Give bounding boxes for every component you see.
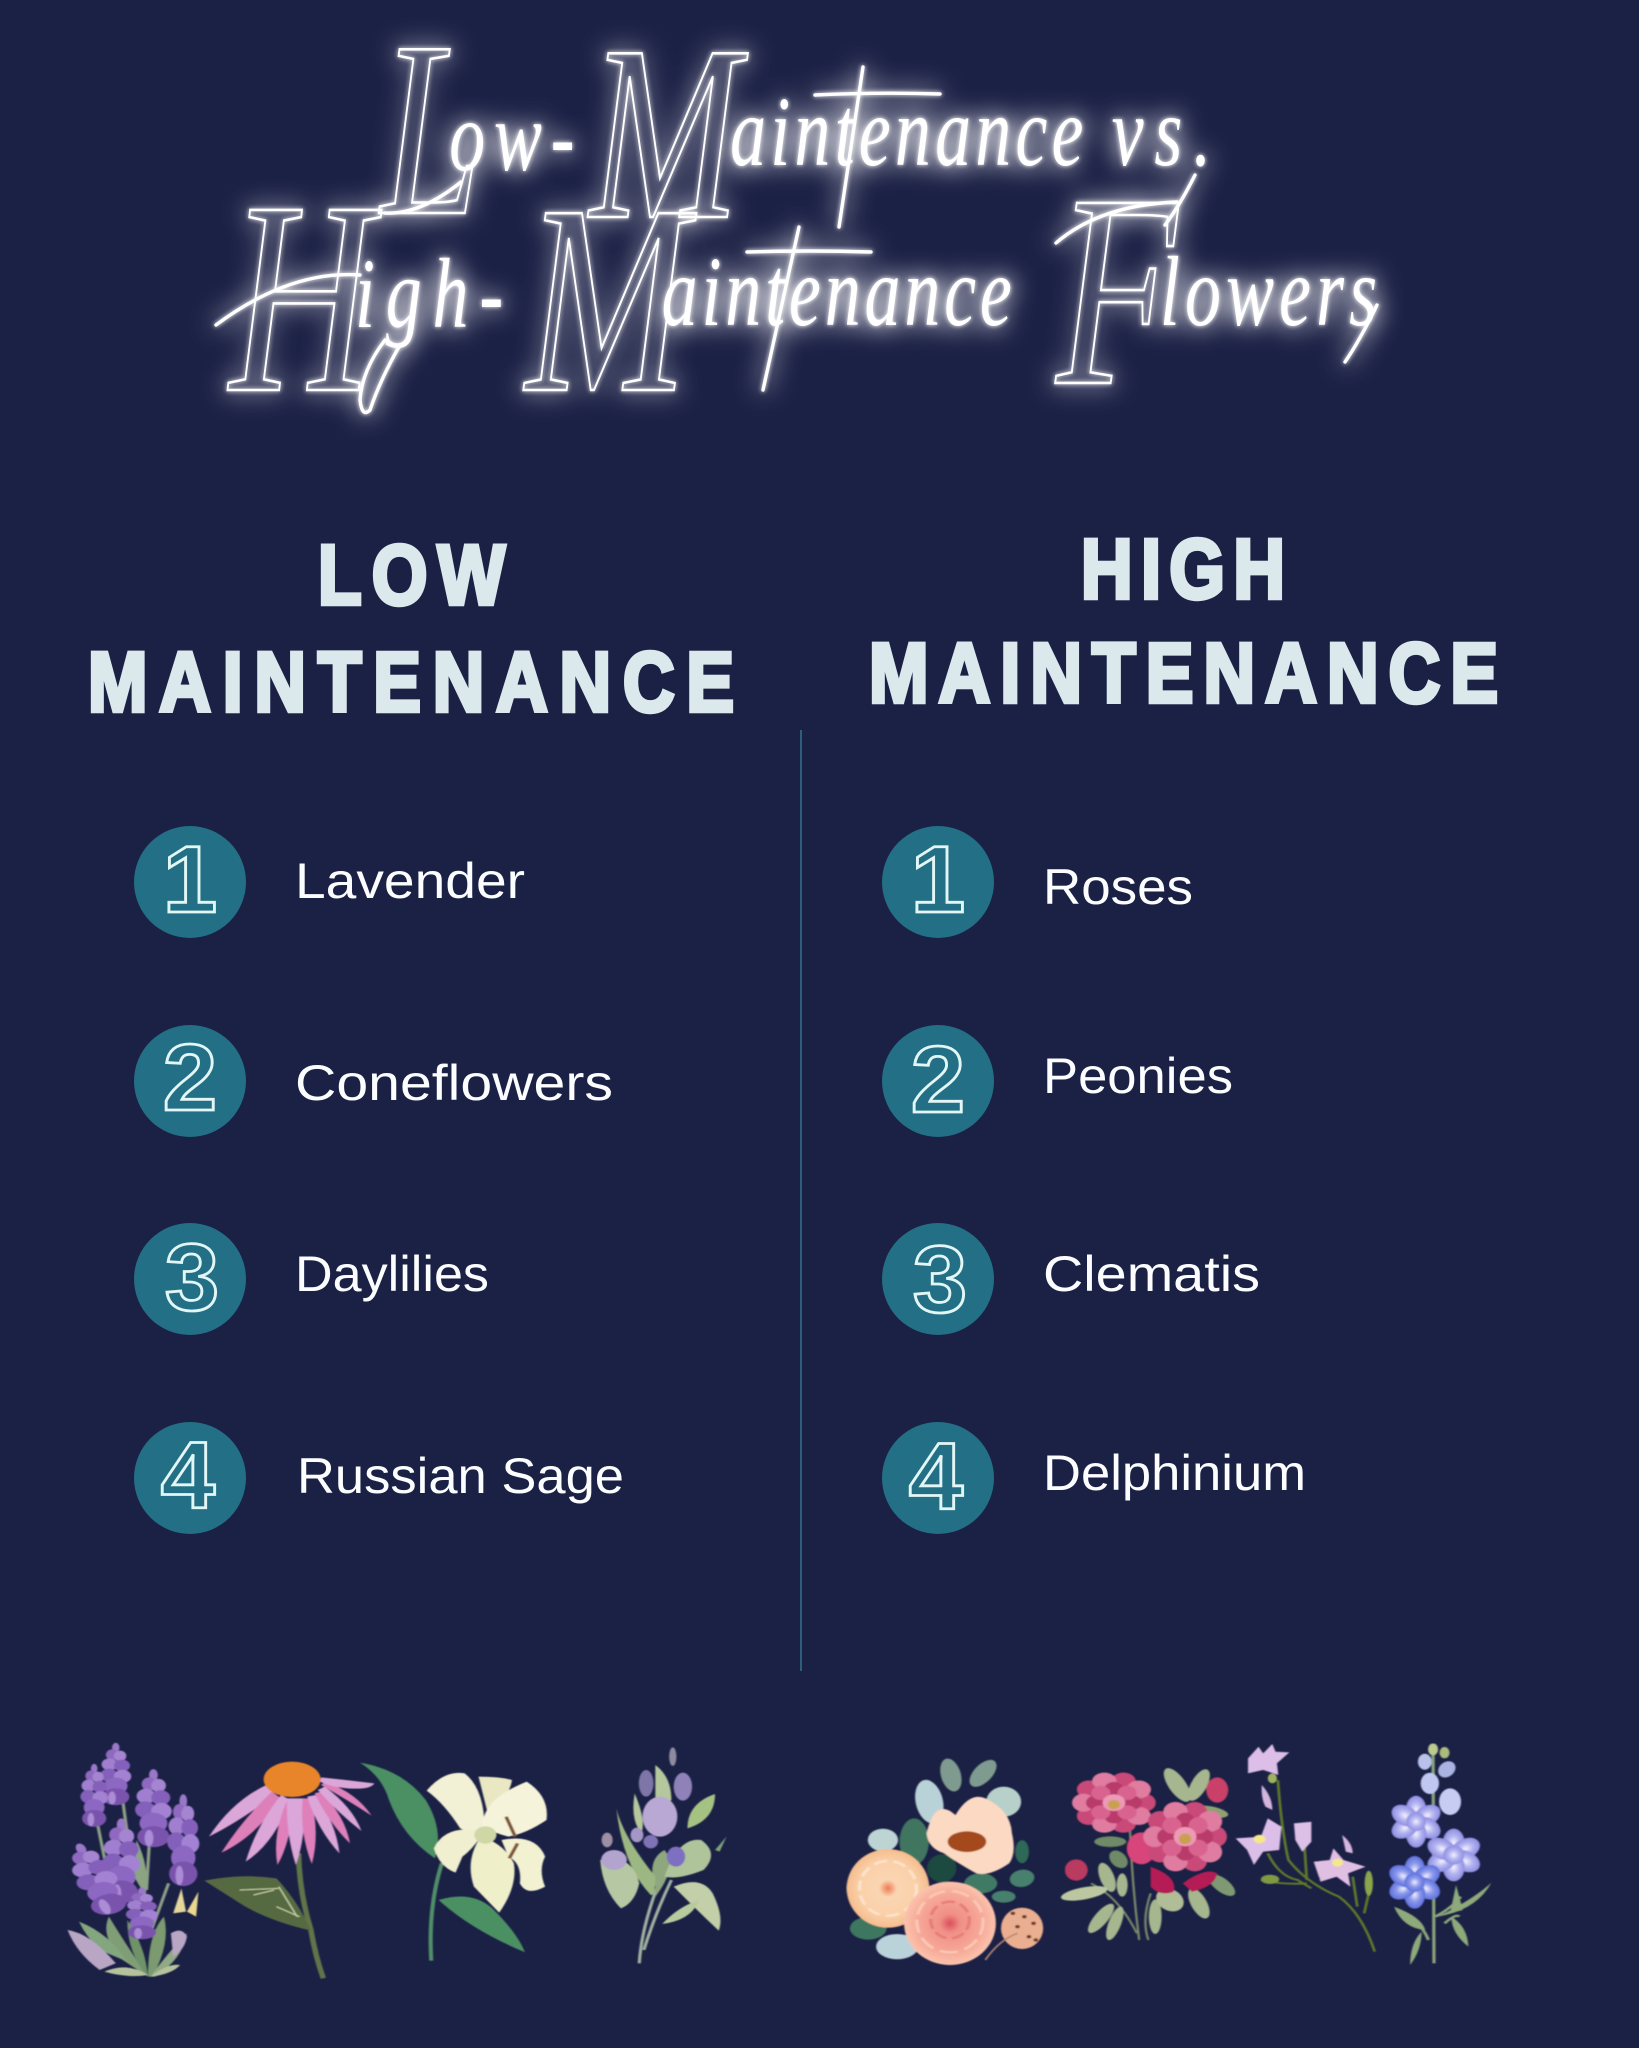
list item: Delphinium: Delphinium <box>1043 1445 1306 1501</box>
title: neon script heading: ow- <box>449 80 583 192</box>
illustration: low maintenance flowers row <box>59 1743 727 1978</box>
illustration: high maintenance flowers row <box>847 1743 1491 1965</box>
list item: Coneflowers: Coneflowers <box>295 1055 613 1111</box>
title: neon script heading: aintenance <box>730 75 1088 187</box>
list item: Russian Sage <box>134 1422 624 1534</box>
icon: clematis <box>1236 1744 1375 1952</box>
list item: Coneflowers: 2 <box>163 1025 217 1131</box>
list item: Lavender: Lavender <box>295 853 525 909</box>
icon: lily <box>360 1763 547 1961</box>
icon: delphinium <box>1385 1743 1491 1965</box>
title: neon script heading: aintenance <box>662 235 1016 347</box>
panel: high maintenance list <box>882 826 1306 1534</box>
heading: high maintenance: MAINTENANCE <box>869 625 1498 720</box>
icon: peonies <box>1059 1766 1240 1941</box>
title: neon script heading: vs. <box>1112 75 1222 187</box>
list item: Clematis: 3 <box>913 1227 967 1333</box>
heading: high maintenance <box>869 521 1498 720</box>
list item: Delphinium <box>882 1422 1306 1534</box>
heading: high maintenance: HIGH <box>1081 521 1285 616</box>
list item: Delphinium: 4 <box>909 1424 964 1530</box>
list item: Roses: 1 <box>911 827 965 933</box>
list item: Lavender <box>134 826 525 938</box>
list item: Clematis <box>882 1223 1260 1335</box>
list item: Daylilies: 3 <box>165 1225 219 1331</box>
heading: low maintenance: LOW <box>318 527 505 622</box>
title: neon script heading: M <box>523 149 697 449</box>
list item: Peonies: 2 <box>911 1027 965 1133</box>
list item: Clematis: Clematis <box>1043 1246 1260 1302</box>
title: neon script heading: H <box>227 144 382 450</box>
list item: Roses <box>882 826 1193 938</box>
panel: low maintenance list <box>134 826 624 1534</box>
list item: Peonies <box>882 1025 1233 1137</box>
title: neon script heading: M <box>587 0 748 272</box>
title: neon script heading: F <box>1055 137 1179 443</box>
list item: Roses: Roses <box>1043 859 1193 915</box>
list item: Lavender: 1 <box>163 827 217 933</box>
list item: Daylilies: Daylilies <box>295 1246 489 1302</box>
list item: Coneflowers <box>134 1025 613 1137</box>
list item: Russian Sage: 4 <box>161 1423 216 1529</box>
heading: low maintenance: MAINTENANCE <box>88 634 734 729</box>
list item: Daylilies <box>134 1223 489 1335</box>
icon: coneflower <box>204 1762 374 1978</box>
icon: lavender <box>59 1743 199 1977</box>
list item: Peonies: Peonies <box>1043 1048 1233 1104</box>
title: neon script heading <box>216 0 1382 450</box>
title: neon script heading: igh- <box>355 237 514 349</box>
column divider <box>800 730 802 1671</box>
list item: Russian Sage: Russian Sage <box>297 1448 624 1504</box>
title: neon script heading: lowers <box>1160 235 1382 347</box>
icon: russian sage <box>600 1747 727 1963</box>
heading: low maintenance <box>88 527 734 729</box>
icon: roses bouquet <box>847 1757 1043 1965</box>
